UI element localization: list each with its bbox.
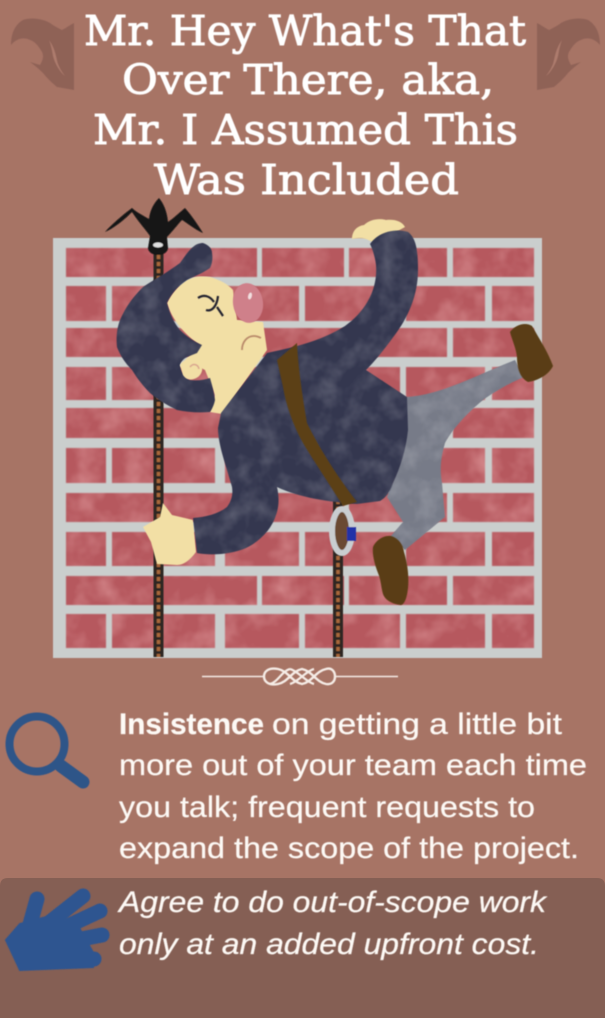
icon: magnifying glass (10, 716, 83, 782)
description text: on getting a little bit (272, 708, 563, 741)
jacket and arms (193, 230, 418, 554)
advice text: Agree to do out-of-scope work (117, 886, 548, 919)
description text: you talk; frequent requests to (119, 791, 535, 824)
title: Mr. I Assumed This (93, 106, 518, 154)
hand raised (352, 219, 405, 242)
advice panel (0, 878, 605, 1018)
hand on rope (143, 503, 196, 565)
shoe upper (510, 324, 553, 382)
neck and face (167, 276, 267, 414)
shoe lower (373, 536, 408, 605)
rope left with grapple (105, 198, 203, 657)
icon: grapple hook (105, 198, 203, 255)
advice text (117, 886, 548, 961)
mortar (53, 238, 542, 658)
ear (180, 359, 202, 379)
hair (117, 243, 215, 412)
description text: more out of your team each time (119, 749, 587, 782)
mouth (242, 336, 261, 350)
decorative leaf right (537, 19, 600, 90)
description text: expand the scope of the project. (119, 832, 579, 865)
band (0, 878, 605, 1018)
title: Was Included (154, 156, 459, 204)
belt strap (277, 343, 357, 506)
knot divider (202, 669, 398, 684)
advice text: only at an added upfront cost. (119, 928, 539, 961)
icon: glove hand (6, 896, 102, 970)
title: Over There, aka, (122, 56, 494, 104)
finding panel (10, 708, 587, 865)
description text (119, 708, 587, 865)
title: Mr. Hey What's That (84, 7, 527, 55)
rope right (333, 500, 343, 657)
eye (198, 296, 223, 316)
nose (230, 281, 266, 325)
bricks (66, 248, 534, 648)
pants (387, 360, 524, 550)
title (84, 7, 527, 204)
carabiner (332, 509, 356, 553)
decorative leaf left (11, 19, 74, 90)
brick wall (53, 238, 542, 658)
climber character (117, 219, 553, 605)
description text: Insistence (119, 708, 264, 741)
